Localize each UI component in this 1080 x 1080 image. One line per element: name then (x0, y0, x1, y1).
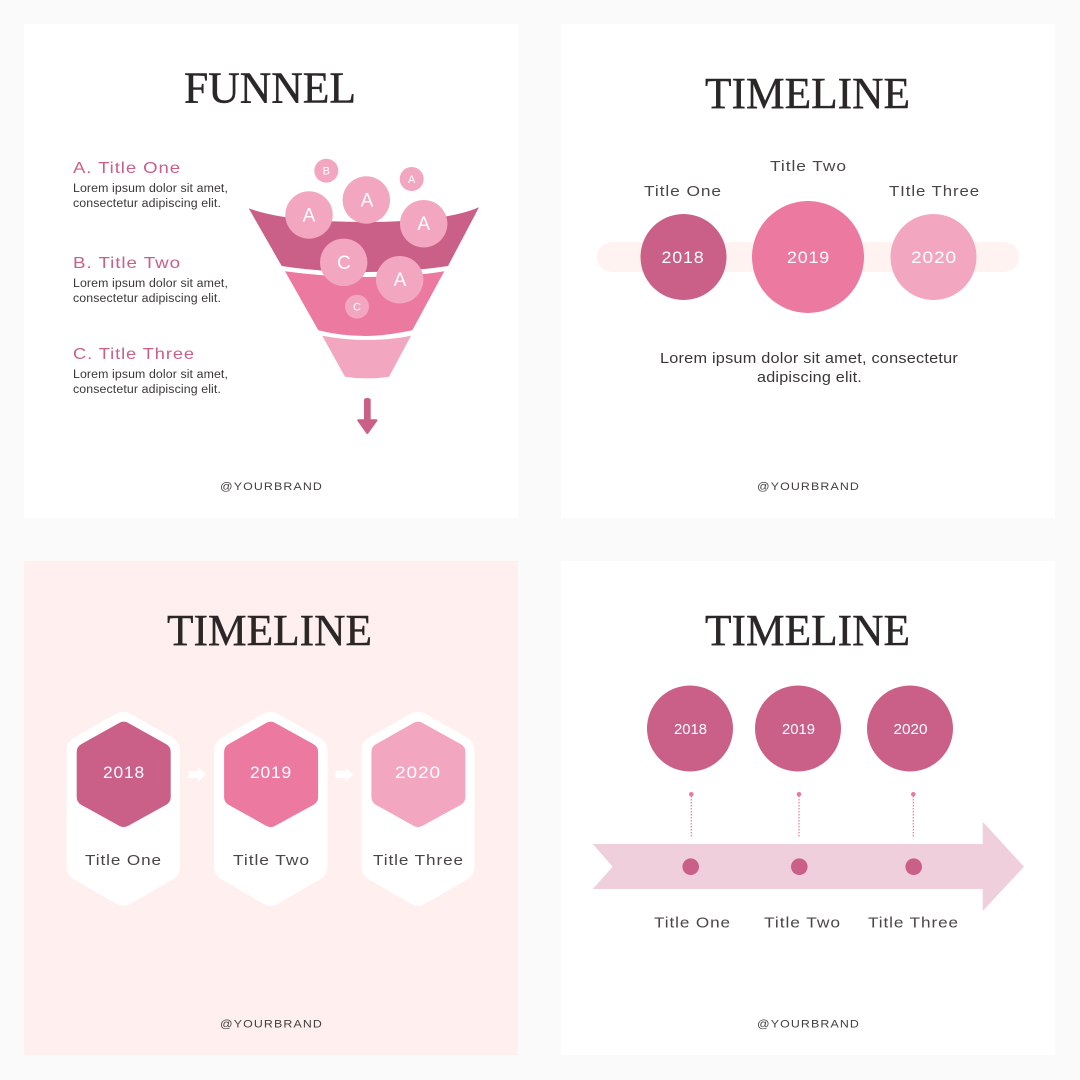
year circles (647, 686, 953, 772)
panel: timeline hexagons (24, 561, 518, 1055)
text block: title two: Lorem ipsum dolor sit amet, (73, 278, 228, 290)
milestone labels: Title Three (868, 914, 959, 932)
funnel chart (249, 159, 479, 378)
year circles: 2018 (674, 721, 707, 738)
bubble letters: C (337, 253, 351, 274)
heading: timeline: TIMELINE (705, 69, 910, 118)
bubble letters: A (408, 174, 416, 186)
step: 2020 (373, 726, 464, 892)
timeline dots (682, 858, 922, 875)
brand handle: @YOURBRAND (757, 481, 860, 493)
text block: title three (73, 346, 228, 396)
bubble letters: A (303, 206, 316, 226)
panel: funnel (24, 24, 518, 518)
milestone: 2020: 2020 (911, 248, 957, 267)
text block: title three: consectetur adipiscing elit. (73, 384, 221, 396)
timeline arrow (593, 822, 1024, 911)
brand handle: @YOURBRAND (220, 1018, 323, 1030)
milestone labels (654, 914, 959, 932)
bubble letters (303, 166, 430, 314)
step: 2020: 2020 (395, 763, 441, 782)
year circles: 2020 (894, 721, 928, 738)
timeline track (597, 242, 1019, 272)
milestone: 2018 (640, 183, 726, 300)
milestone: 2019: Title Two (770, 158, 847, 175)
step: 2018: Title One (85, 852, 162, 869)
text block: title three: C. Title Three (73, 346, 195, 363)
bubble letters: A (417, 214, 430, 235)
text block: title two (73, 255, 228, 305)
bubbles (285, 159, 447, 319)
bubble letters: B (323, 166, 330, 178)
bubble letters: C (353, 302, 361, 314)
heading: timeline: TIMELINE (167, 606, 372, 655)
arrow: funnel output (358, 399, 376, 433)
funnel band: middle (285, 271, 444, 336)
arrow: step two to three (336, 767, 354, 782)
milestone: 2018: 2018 (662, 248, 704, 267)
text block: title one: Lorem ipsum dolor sit amet, (73, 183, 228, 195)
heading: timeline: TIMELINE (705, 606, 910, 655)
step: 2019: 2019 (250, 763, 292, 782)
heading: funnel: FUNNEL (184, 64, 356, 112)
step: 2020: Title Three (373, 852, 464, 869)
milestone labels: Title One (654, 914, 731, 932)
milestone: 2020: TItle Three (889, 183, 980, 200)
text block: title two: B. Title Two (73, 255, 181, 272)
step: 2018 (81, 726, 166, 892)
milestone labels: Title Two (764, 914, 841, 932)
text block: title one: A. Title One (73, 160, 181, 177)
bubble letters: A (394, 270, 407, 291)
connector pins (689, 792, 916, 837)
milestone: 2019 (752, 158, 864, 313)
panel: timeline circles (561, 24, 1055, 518)
year circles: 2019 (782, 721, 815, 738)
arrow: step one to two (188, 767, 206, 782)
description: Lorem ipsum dolor sit amet, consectetur (660, 350, 958, 367)
step: 2019: Title Two (233, 852, 310, 869)
funnel band: top (249, 207, 479, 272)
brand handle: @YOURBRAND (220, 481, 323, 493)
milestone: 2019: 2019 (787, 248, 830, 267)
step: 2018: 2018 (103, 763, 145, 782)
bubble letters: A (361, 190, 374, 212)
description (660, 350, 958, 386)
text block: title two: consectetur adipiscing elit. (73, 293, 221, 305)
text block: title three: Lorem ipsum dolor sit amet, (73, 369, 228, 381)
funnel band: bottom (322, 336, 411, 378)
text block: title one (73, 160, 228, 210)
text block: title one: consectetur adipiscing elit. (73, 198, 221, 210)
milestone: 2020 (889, 183, 980, 300)
panel: timeline arrow (561, 561, 1055, 1055)
milestone: 2018: Title One (644, 183, 722, 200)
brand handle: @YOURBRAND (757, 1018, 860, 1030)
step: 2019 (228, 726, 313, 892)
description: adipiscing elit. (757, 369, 862, 386)
